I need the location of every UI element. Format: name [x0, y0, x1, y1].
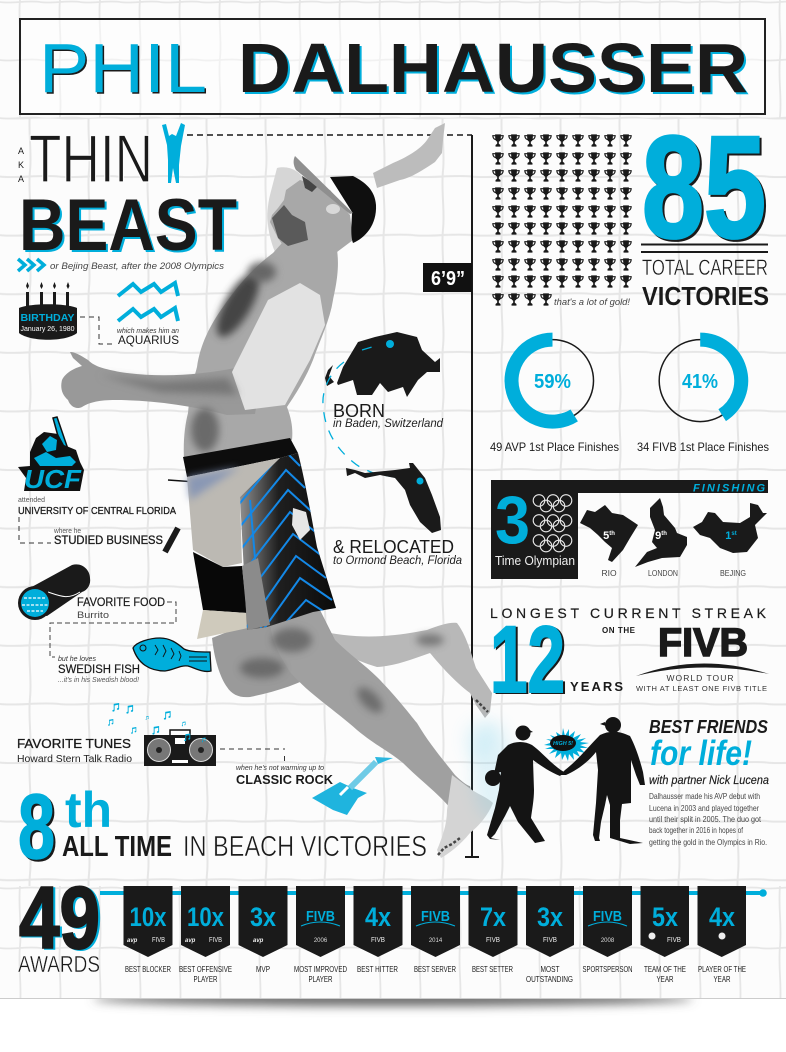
donut chart: 59% AVP: 49 AVP 1st Place Finishes	[490, 440, 619, 454]
AKA	[18, 146, 24, 184]
map: Bejing	[693, 503, 767, 578]
banner: best offensive player: avp	[185, 938, 196, 944]
banner: best hitter: 4x	[365, 902, 391, 932]
university text: attended	[18, 495, 45, 504]
best friends text: for life!	[650, 734, 752, 773]
high five burst	[544, 728, 589, 761]
raised forearm and hand	[373, 123, 445, 188]
food connector	[50, 602, 176, 657]
map: London	[635, 498, 687, 578]
favorite food text: FAVORITE FOOD	[77, 597, 165, 609]
title	[20, 19, 765, 114]
banner: best offensive player	[179, 886, 232, 984]
banner: player of the year: 4x	[709, 902, 735, 932]
banner: team of the year: 5x	[652, 902, 678, 932]
icon: burrito	[18, 564, 90, 620]
banner: player of the year	[698, 886, 746, 984]
banner: best blocker: 10x	[130, 902, 166, 932]
49 awards: 49	[19, 868, 100, 967]
map: London: 9	[655, 530, 661, 542]
Aquarius text: which makes him an	[117, 326, 179, 335]
partnership paragraph: getting the gold in the Olympics in Rio.	[649, 838, 767, 847]
classic rock text	[236, 763, 333, 787]
Swedish fish text: SWEDISH FISH	[58, 664, 140, 676]
AKA: A	[18, 174, 24, 184]
FIVB logo	[636, 621, 769, 693]
favorite food text	[77, 597, 165, 621]
donut chart: 41% FIVB: 41%	[682, 370, 718, 393]
ear	[326, 204, 340, 214]
banner: most outstanding: 3x	[537, 902, 563, 932]
university text: UNIVERSITY OF CENTRAL FLORIDA	[18, 505, 176, 517]
map: Bejing: BEJING	[720, 568, 746, 578]
blue journey dashes	[323, 347, 420, 481]
page drop shadow	[93, 992, 693, 1006]
front foot	[437, 775, 493, 858]
longest streak	[490, 605, 767, 714]
banner: best server	[411, 886, 460, 974]
relocated text: & RELOCATED	[333, 537, 454, 557]
partnership paragraph	[649, 792, 767, 847]
AKA: K	[18, 160, 24, 170]
shorts left panel	[187, 458, 280, 567]
Olympian panel	[491, 480, 768, 579]
banner: most improved player: 2006	[314, 938, 328, 944]
icon: Swedish fish	[133, 638, 211, 671]
partnership paragraph: Dalhausser made his AVP debut with	[649, 792, 760, 801]
birthday cake: BIRTHDAY	[20, 313, 75, 324]
best friends text: BEST FRIENDS	[649, 717, 768, 737]
banner: sportsperson: SPORTSPERSON	[582, 964, 632, 974]
banner: best hitter	[354, 886, 402, 974]
map: Bejing: 1	[725, 530, 731, 542]
leg shading	[240, 628, 444, 717]
85 victories: VICTORIES	[642, 281, 769, 311]
height label 6'9": 6’9”	[431, 268, 465, 290]
icon: aquarius	[118, 283, 178, 321]
partnership paragraph: back together in 2016 in hopes of	[649, 826, 744, 835]
banner: team of the year: FIVB	[667, 937, 681, 944]
banner: best offensive player: FIVB	[209, 937, 222, 944]
icon: boombox	[144, 730, 216, 766]
waistband	[183, 438, 298, 477]
shorts emblem	[292, 508, 310, 540]
banner: best setter: 7x	[480, 902, 506, 932]
banner: best blocker: FIVB	[152, 937, 165, 944]
banner: sportsperson: FIVB	[593, 908, 622, 925]
Beast nickname: BEAST	[21, 187, 239, 268]
chevron arrows	[18, 259, 44, 271]
banner: best offensive player: 10x	[187, 902, 224, 932]
banner: most outstanding: MOST	[540, 964, 560, 974]
trophy grid	[492, 134, 632, 306]
relocated text	[333, 537, 462, 567]
high five burst: HIGH 5!	[553, 741, 573, 747]
FIVB logo: FIVB	[658, 621, 748, 665]
classic rock text: CLASSIC ROCK	[236, 773, 333, 787]
donut chart: 59% AVP	[490, 340, 619, 454]
Swedish fish text: ...it's in his Swedish blood!	[58, 675, 140, 684]
longest streak: LONGEST CURRENT STREAK	[490, 605, 767, 621]
born text: in Baden, Switzerland	[333, 416, 443, 430]
banner: best offensive player: PLAYER	[194, 974, 218, 984]
banner: best setter	[468, 886, 518, 974]
banner: team of the year	[640, 886, 689, 984]
Olympian panel: Time Olympian	[495, 554, 575, 568]
favorite tunes text: Howard Stern Talk Radio	[17, 754, 132, 765]
donut chart: 41% FIVB	[637, 340, 769, 454]
back lower leg	[330, 623, 492, 718]
banner: best setter: FIVB	[486, 937, 500, 944]
banner: MVP	[238, 886, 288, 974]
Aquarius text: AQUARIUS	[118, 333, 179, 347]
map: Rio	[580, 505, 638, 578]
8th all time: ALL TIME	[62, 831, 172, 863]
banner: best server: BEST SERVER	[414, 964, 456, 974]
favorite tunes text	[17, 737, 132, 765]
blue sand spray	[464, 720, 512, 820]
49 awards: AWARDS	[18, 951, 100, 977]
head	[270, 180, 353, 252]
banner: most outstanding: FIVB	[543, 937, 557, 944]
icon: guitar	[312, 757, 393, 815]
birthday cake	[19, 282, 77, 340]
studied business text: where he	[53, 526, 81, 535]
8th all time: 8	[20, 778, 57, 880]
title: DALHAUSSER	[240, 31, 750, 109]
banner: best hitter: FIVB	[371, 937, 385, 944]
donut chart: 41% FIVB: 34 FIVB 1st Place Finishes	[637, 440, 769, 454]
title: PHIL	[40, 30, 208, 108]
banner: team of the year: TEAM OF THE	[644, 964, 686, 974]
banner: best offensive player: BEST OFFENSIVE	[179, 964, 232, 974]
8th all time: th	[65, 782, 112, 838]
8th all time: IN BEACH VICTORIES	[183, 831, 427, 863]
favorite food text: Burrito	[77, 610, 109, 621]
music notes	[108, 703, 186, 735]
birthday cake: January 26, 1980	[20, 324, 74, 333]
born text	[333, 401, 443, 430]
banner: best server: FIVB	[421, 908, 450, 925]
Florida map	[346, 463, 441, 533]
Bejing Beast note: or Bejing Beast, after the 2008 Olympics	[50, 261, 224, 272]
chest highlight and hair	[191, 262, 325, 452]
banner: most outstanding	[526, 886, 574, 984]
arm behind head	[268, 167, 305, 252]
title: PHIL	[39, 29, 207, 107]
friends silhouette right	[560, 717, 645, 844]
banner: sportsperson: 2008	[601, 938, 615, 944]
banner: best server: 2014	[429, 938, 443, 944]
longest streak: 12	[490, 607, 565, 713]
torso	[184, 243, 338, 460]
map: London: LONDON	[648, 568, 678, 578]
shorts black lower panel	[193, 552, 247, 613]
Thin nickname	[18, 121, 153, 197]
classic rock text: when he's not warming up to	[236, 763, 324, 772]
banner: best blocker	[124, 886, 172, 974]
trophy caption: that's a lot of gold!	[554, 297, 631, 307]
university text	[18, 495, 176, 517]
banner: most improved player: MOST IMPROVED	[294, 964, 347, 974]
favorite tunes text: FAVORITE TUNES	[17, 737, 131, 751]
longest streak: ON THE	[602, 626, 636, 635]
title: DALHAUSSER	[238, 29, 748, 107]
forearm shading	[100, 375, 238, 395]
height dashed line and ruler	[187, 135, 479, 857]
banner: sportsperson	[582, 886, 632, 974]
banner: most improved player: PLAYER	[308, 974, 332, 984]
timeline bar	[100, 889, 767, 897]
studied business text: STUDIED BUSINESS	[54, 535, 163, 547]
map: Bejing: st	[731, 531, 737, 537]
friends silhouette left	[485, 726, 564, 843]
Aquarius text	[117, 326, 179, 347]
map: London: th	[661, 531, 667, 537]
best friends text	[649, 717, 769, 847]
map: Rio: th	[609, 531, 615, 537]
AKA: A	[18, 146, 24, 156]
shorts right panel	[240, 453, 336, 630]
longest streak: YEARS	[570, 679, 623, 694]
toes	[438, 700, 488, 855]
icon: diploma	[165, 528, 178, 552]
studied business text	[53, 526, 163, 547]
partnership paragraph: Lucena in 2003 and played together	[649, 804, 759, 813]
music connector	[220, 749, 285, 761]
university connector	[19, 517, 51, 543]
Swedish fish text	[58, 654, 140, 684]
best friends text: with partner Nick Lucena	[649, 775, 769, 787]
FIVB logo: WITH AT LEAST ONE FIVB TITLE	[636, 684, 767, 693]
banner: MVP: avp	[253, 938, 264, 944]
banner: player of the year: YEAR	[714, 974, 730, 984]
icon: blue thin figure	[162, 123, 185, 183]
back thigh	[212, 610, 340, 697]
shorts blue chevrons	[240, 455, 332, 628]
sunglasses	[302, 176, 318, 192]
born in Switzerland map	[325, 332, 440, 397]
banner: team of the year: YEAR	[656, 974, 674, 984]
longest streak: 12	[492, 608, 567, 714]
banner: most outstanding: OUTSTANDING	[526, 974, 573, 984]
forward arm and hand	[61, 352, 262, 415]
shorts gray inner panel	[242, 558, 270, 630]
Olympian panel: 3	[495, 482, 530, 558]
banner: best hitter: BEST HITTER	[357, 964, 398, 974]
banner: best blocker: BEST BLOCKER	[125, 964, 171, 974]
drawstring	[168, 470, 206, 488]
8th all time	[18, 776, 427, 880]
8th all time: 8	[18, 776, 55, 878]
player photo	[61, 123, 493, 858]
map: Rio: 5	[603, 530, 609, 542]
front leg	[270, 608, 472, 808]
FIVB logo: WORLD TOUR	[666, 673, 734, 683]
birthday connector	[80, 317, 115, 344]
Swedish fish text: but he loves	[58, 654, 96, 663]
donut chart: 59% AVP: 59%	[534, 370, 571, 393]
banner: player of the year: PLAYER OF THE	[698, 964, 746, 974]
banner: best blocker: avp	[127, 938, 138, 944]
banner: best setter: BEST SETTER	[472, 964, 513, 974]
Beast nickname: BEAST	[19, 185, 237, 266]
height label 6'9"	[423, 263, 472, 292]
shorts cuff	[197, 610, 248, 639]
partnership paragraph: until their split in 2005. The duo got	[649, 815, 762, 824]
cap	[330, 176, 376, 243]
map: Rio: RIO	[601, 568, 617, 578]
relocated text: to Ormond Beach, Florida	[333, 553, 462, 567]
THIN word: THIN	[29, 121, 153, 197]
UCF logo: UCF	[24, 464, 82, 494]
banner: most improved player: FIVB	[306, 908, 335, 925]
location dots	[386, 340, 424, 484]
cap brim	[294, 156, 353, 214]
olympic rings	[533, 495, 572, 552]
banner: most improved player	[294, 886, 347, 984]
49 awards: 49	[21, 869, 102, 968]
beard	[272, 205, 308, 246]
Olympian panel: FINISHING	[693, 482, 765, 494]
banner: MVP: MVP	[256, 964, 270, 974]
shorts left shading	[187, 467, 240, 500]
banner: MVP: 3x	[250, 902, 276, 932]
UCF logo	[18, 417, 84, 494]
born text: BORN	[333, 401, 385, 421]
